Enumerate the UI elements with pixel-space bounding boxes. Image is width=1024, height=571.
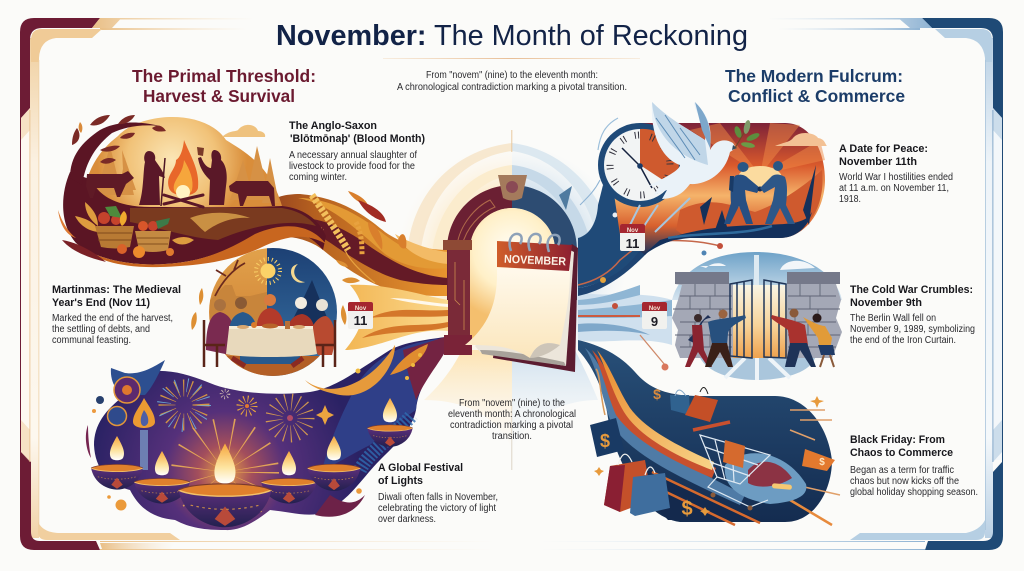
- text: Anglo-Saxon Blood Month: A necessary annual slaughter of: [289, 150, 417, 161]
- text: Anglo-Saxon Blood Month: The Anglo-Saxon: [289, 120, 377, 132]
- text: Black Friday: chaos but now kicks off the: [850, 476, 960, 487]
- dollar sign and sparkles: $: [681, 498, 693, 520]
- text: Anglo-Saxon Blood Month: [289, 120, 425, 183]
- text: Cold War: The Cold War Crumbles:: [850, 284, 973, 296]
- basket two: [117, 218, 174, 258]
- peacock ornament: [111, 360, 165, 395]
- text: Anglo-Saxon Blood Month: coming winter.: [289, 172, 347, 183]
- text: Anglo-Saxon Blood Month: livestock to provide food for the: [289, 161, 416, 172]
- illustration: Martinmas feast: [191, 245, 360, 386]
- text: Festival of Lights: over darkness.: [378, 514, 436, 525]
- cloud: [775, 133, 827, 146]
- bare tree: [215, 260, 245, 296]
- calendar icon: Nov 11 right: Nov: [627, 228, 639, 234]
- center calendar: [465, 234, 578, 372]
- title underline: [383, 58, 640, 59]
- ground: [63, 172, 326, 264]
- soldiers shaking hands: [724, 175, 760, 224]
- left stream: harvest ribbon into the arch: [226, 191, 448, 350]
- bag with dollar sign: [590, 418, 624, 457]
- dollar tag: [802, 449, 835, 471]
- text: center note: contradiction marking a pivotal: [450, 420, 573, 431]
- frame: right navy border: [540, 18, 1003, 550]
- leaves around circle: [191, 260, 360, 330]
- illustration: Berlin Wall: [672, 252, 842, 380]
- text: Martinmas: communal feasting.: [52, 335, 131, 346]
- text: Date for Peace: [839, 143, 953, 205]
- bags upper: [670, 387, 718, 422]
- open gates: [730, 280, 786, 358]
- text: Martinmas: the settling of debts, and: [52, 324, 150, 335]
- intro text: A chronological contradiction marking a pivotal transition.: [397, 82, 627, 93]
- text: Martinmas: Year's End (Nov 11): [52, 297, 150, 309]
- illustration: Black Friday: [578, 340, 840, 525]
- heading: right column: The Modern Fulcrum:: [725, 66, 903, 86]
- tree with leaves: [70, 123, 160, 185]
- text: Black Friday: Chaos to Commerce: [850, 447, 953, 459]
- illustration: peace scene: [598, 102, 827, 258]
- heading: right column: Conflict & Commerce: [728, 86, 905, 106]
- text: center note: [448, 398, 576, 442]
- calendar icon: Nov 11 right: [620, 224, 645, 251]
- illustration: Anglo-Saxon harvest scene: [58, 115, 326, 267]
- pattern dots: [360, 415, 412, 470]
- sun and moon: [260, 264, 276, 278]
- dollar tag: $: [819, 457, 825, 468]
- ground: [640, 212, 812, 258]
- fire: [168, 140, 198, 196]
- text: Cold War: November 9, 1989, symbolizing: [850, 324, 975, 335]
- people at the gate: [685, 308, 835, 367]
- bags lower: [604, 454, 670, 516]
- intro text: [397, 70, 627, 93]
- calendar icon: Nov 11 right: 11: [626, 236, 639, 251]
- text: Date for Peace: at 11 a.m. on November 11,: [839, 183, 949, 194]
- text: center note: From "novem" (nine) to the: [459, 398, 565, 409]
- tree line: [96, 146, 279, 203]
- calendar icon: Nov 11: Nov: [355, 306, 367, 312]
- calendar icon: Nov 11: 11: [354, 313, 367, 328]
- wheat: [266, 195, 375, 283]
- road stripes: [585, 348, 745, 505]
- clock: [598, 123, 682, 207]
- wall blocks: [672, 272, 842, 358]
- lower purple sweep: [315, 495, 365, 517]
- calendar icon: Nov 11: [348, 302, 373, 329]
- cloud: [222, 125, 265, 137]
- center calendar: NOVEMBER: [504, 254, 567, 268]
- text: Anglo-Saxon Blood Month: 'Blōtmōnaþ' (Blood Month): [290, 133, 425, 145]
- text: Black Friday: global holiday shopping season.: [850, 487, 978, 498]
- text: Cold War: November 9th: [850, 297, 922, 309]
- frame: left burgundy border: [20, 18, 495, 550]
- heading: left column: Harvest & Survival: [143, 86, 295, 106]
- shopping cart: [693, 422, 770, 507]
- text: Cold War: The Berlin Wall fell on: [850, 313, 936, 324]
- central rays: [193, 440, 257, 504]
- bright gateway: [725, 285, 790, 358]
- title: November: The Month of Reckoning: [276, 20, 748, 52]
- text: center note: eleventh month: A chronological: [448, 409, 576, 420]
- calendar icon: Nov 9: 9: [651, 314, 658, 329]
- bag with dollar sign: $: [600, 431, 610, 451]
- calendar icon: Nov 9: Nov: [649, 306, 661, 312]
- calendar icon: Nov 9: [642, 302, 667, 329]
- man with raised arm: [198, 150, 227, 205]
- dove: [648, 102, 737, 199]
- chairs: [204, 320, 335, 367]
- diners: [206, 312, 233, 355]
- text: Date for Peace: November 11th: [839, 156, 917, 168]
- text: Festival of Lights: celebrating the victory of light: [378, 503, 496, 514]
- text: Cold War: the end of the Iron Curtain.: [850, 335, 956, 346]
- center portal arch: [443, 175, 577, 355]
- basket one: [95, 206, 134, 248]
- wheat sheaf: [75, 202, 194, 244]
- heading: right column: [725, 66, 905, 106]
- text: Cold War: [850, 284, 975, 346]
- illustration: Black Friday: $: [653, 386, 661, 402]
- tall lamp: [133, 398, 155, 428]
- fireworks: [167, 388, 201, 422]
- intro text: From "novem" (nine) to the eleventh month:: [426, 70, 598, 81]
- text: Black Friday: Began as a term for traffic: [850, 465, 954, 476]
- woman with staff: [139, 151, 165, 205]
- text: Date for Peace: 1918.: [839, 194, 861, 205]
- right stream: flows and circuit lines: [578, 118, 723, 370]
- heading: left column: The Primal Threshold:: [132, 66, 316, 86]
- olive branch: [733, 120, 761, 149]
- table: [240, 354, 300, 364]
- text: Date for Peace: A Date for Peace:: [839, 143, 928, 155]
- text: Martinmas: Marked the end of the harvest,: [52, 313, 173, 324]
- sky and sun: [82, 117, 282, 240]
- central glow and halo rings: [395, 130, 630, 470]
- text: Black Friday: [850, 434, 978, 498]
- text: Festival of Lights: Diwali often falls in November,: [378, 492, 498, 503]
- text: Martinmas: [52, 284, 181, 346]
- text: center note: transition.: [492, 431, 532, 442]
- text: Martinmas: Martinmas: The Medieval: [52, 284, 181, 296]
- train: [725, 453, 806, 504]
- text: Festival of Lights: A Global Festival: [378, 462, 463, 474]
- text: Festival of Lights: of Lights: [378, 475, 423, 487]
- illustration: Diwali festival: [86, 337, 445, 530]
- oil lamps: [91, 398, 413, 527]
- cattle: [86, 171, 134, 198]
- text: Festival of Lights: [378, 462, 498, 525]
- text: Black Friday: Black Friday: From: [850, 434, 945, 446]
- heading: left column: [132, 66, 316, 106]
- text: Date for Peace: World War I hostilities ended: [839, 172, 953, 183]
- stream rays from clock: [625, 198, 690, 235]
